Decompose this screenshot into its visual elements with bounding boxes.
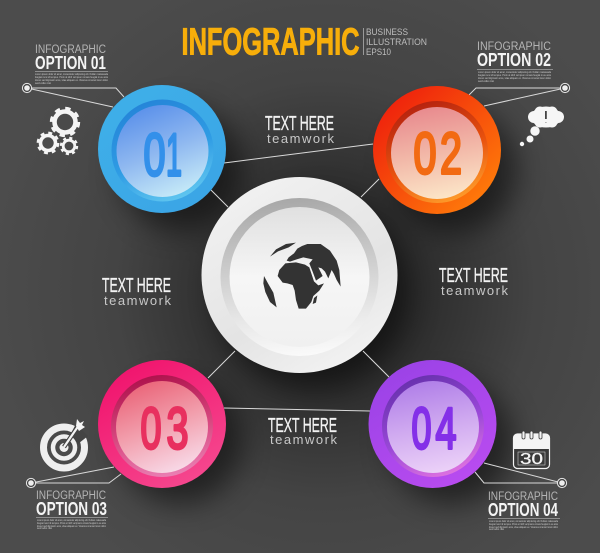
circle 02 — [373, 86, 501, 214]
circle 02: 0 — [414, 122, 436, 186]
label: option 02: OPTION 02 — [477, 50, 551, 70]
text group: left: TEXT HERE — [102, 275, 171, 297]
label: option 03: donec sed dignissim eros, vitae aliquam ex. Vivamus sit amet lorem dolor — [37, 524, 106, 528]
circle 04 — [368, 360, 496, 488]
text group: left — [102, 275, 172, 308]
label: option 02: feugiat nunc id tempus. Proin at nibh vel ipsum ornare feugiat in eu ante — [478, 73, 551, 77]
label: option 01: Lorem ipsum dolor sit amet, consectetur adipiscing elit. Nullam malesuada — [35, 72, 108, 76]
text group: bottom — [268, 415, 338, 447]
label: option 03 — [36, 490, 108, 530]
circle 02: 2 — [440, 122, 462, 186]
text group: top — [265, 113, 334, 146]
text group: bottom: TEXT HERE — [268, 415, 337, 437]
subtitle block: EPS10 — [366, 47, 391, 58]
node: option 03 — [26, 478, 36, 488]
circle 03 — [98, 360, 226, 488]
title: INFOGRAPHIC — [182, 22, 360, 64]
label: option 02: sed odio nisi — [478, 79, 494, 83]
icon: thought bubble: . — [545, 119, 547, 125]
text group: bottom: teamwork — [270, 432, 338, 447]
label: option 04 — [488, 491, 560, 531]
label: option 01: OPTION 01 — [35, 53, 106, 73]
label: option 04: INFOGRAPHIC — [488, 491, 558, 503]
text group: left: teamwork — [104, 293, 172, 308]
label: option 04: OPTION 04 — [488, 500, 558, 520]
icon: globe — [263, 243, 341, 309]
circle 01 — [98, 85, 226, 213]
soft circle shadows — [118, 106, 517, 504]
circle 03: 0 — [140, 396, 162, 462]
label: option 02: donec sed dignissim eros, vitae aliquam ex. Vivamus sit amet lorem dolor — [478, 76, 551, 80]
label: option 03: feugiat nunc id tempus. Proin at nibh vel ipsum ornare feugiat in eu ante — [37, 521, 106, 525]
text group: right: TEXT HERE — [439, 265, 508, 287]
circle 04: 0 — [412, 396, 432, 462]
label: option 01: feugiat nunc id tempus. Proin at nibh vel ipsum ornare feugiat in eu ante — [35, 75, 108, 79]
label: option 01: sed odio nisi — [35, 81, 51, 85]
node: option 01 — [22, 83, 32, 93]
icon: thought bubble — [520, 106, 564, 146]
icon: calendar — [513, 431, 550, 468]
subtitle block: BUSINESS — [366, 27, 408, 38]
label: option 01: INFOGRAPHIC — [35, 44, 106, 56]
label: option 03: INFOGRAPHIC — [36, 490, 106, 502]
label: option 04: feugiat nunc id tempus. Proin at nibh vel ipsum ornare feugiat in eu ante — [489, 522, 558, 526]
subtitle block: ILLUSTRATION — [366, 37, 427, 48]
center circle — [202, 177, 398, 373]
label: option 04: Lorem ipsum dolor sit amet, consectetur adipiscing elit. Nullam malesuada — [489, 519, 558, 523]
connector lines — [27, 88, 565, 483]
label: option 04: donec sed dignissim eros, vitae aliquam ex. Vivamus sit amet lorem dolor — [489, 525, 558, 529]
label: option 01 — [35, 44, 108, 85]
label: option 02: Lorem ipsum dolor sit amet, consectetur adipiscing elit. Nullam malesuada — [478, 70, 551, 74]
text group: top: teamwork — [267, 131, 334, 146]
label: option 03: sed odio nisi — [37, 526, 52, 530]
circle 01: 0 — [144, 122, 166, 188]
circle 03: 3 — [166, 396, 188, 462]
text group: right: teamwork — [441, 283, 508, 298]
circle 04: 4 — [436, 396, 456, 462]
text group: right — [439, 265, 508, 298]
icon: target with arrow — [44, 419, 88, 468]
icon: calendar: 30 — [520, 451, 543, 468]
label: option 03: Lorem ipsum dolor sit amet, consectetur adipiscing elit. Nullam malesuada — [37, 518, 106, 522]
icon: gears — [38, 108, 78, 154]
node: option 02 — [560, 83, 570, 93]
subtitle block — [363, 27, 427, 58]
text group: top: TEXT HERE — [265, 113, 334, 135]
label: option 02 — [477, 41, 553, 83]
circle 01: 1 — [166, 122, 182, 188]
label: option 04: sed odio nisi — [489, 527, 504, 531]
label: option 01: donec sed dignissim eros, vitae aliquam ex. Vivamus sit amet lorem dolor — [35, 78, 108, 82]
node: option 04 — [557, 478, 567, 488]
label: option 02: INFOGRAPHIC — [477, 41, 551, 53]
label: option 03: OPTION 03 — [36, 499, 107, 519]
